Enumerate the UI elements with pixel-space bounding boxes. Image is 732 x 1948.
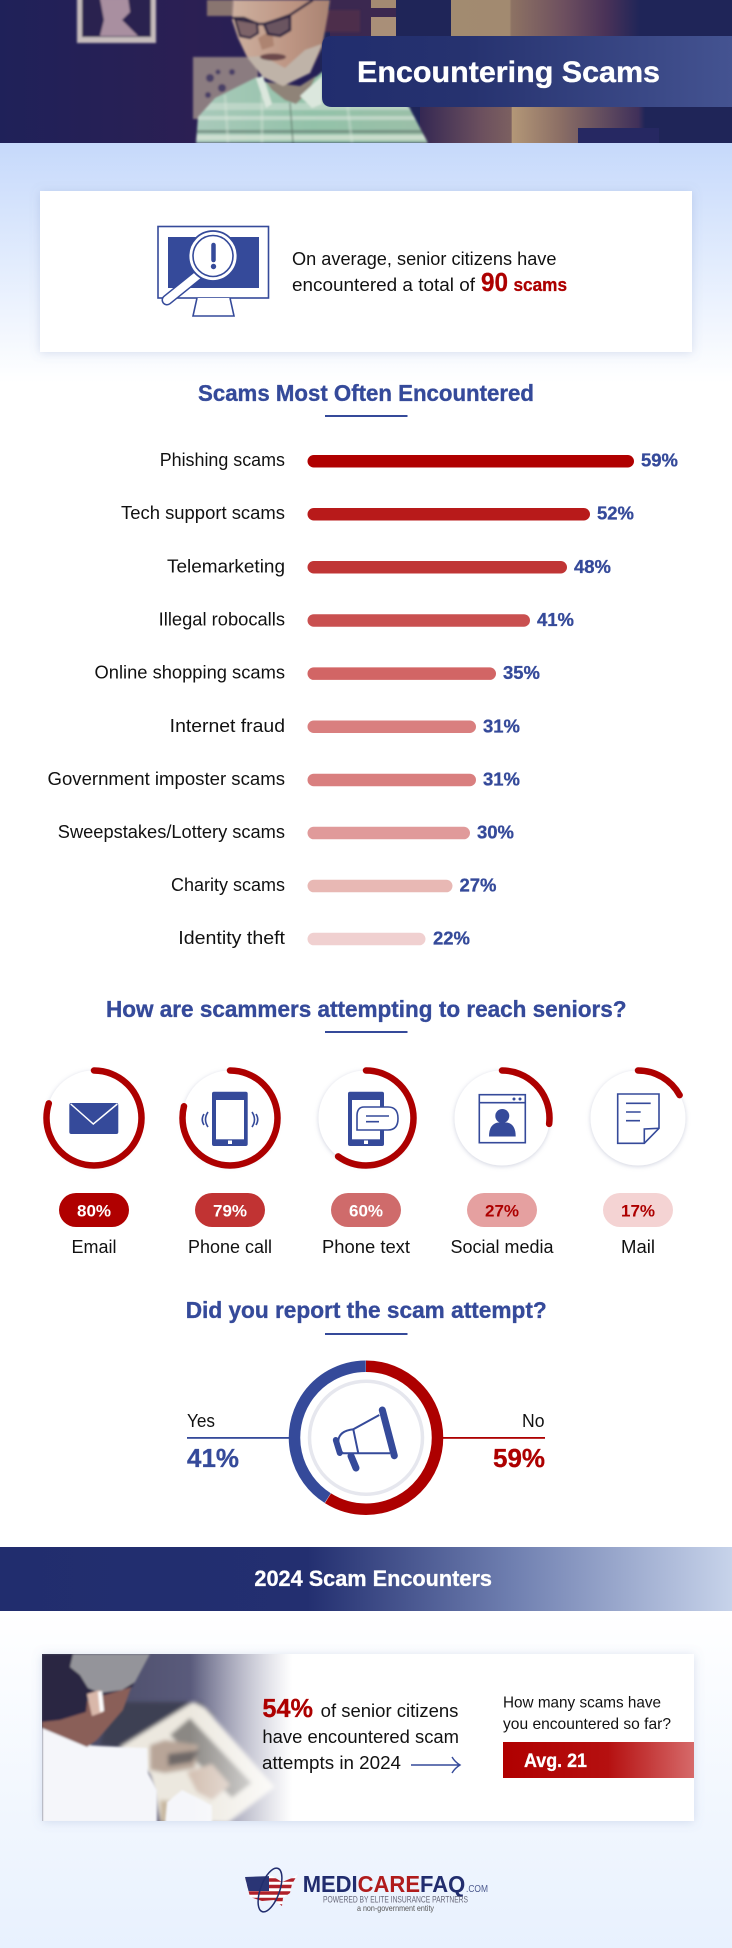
bar: Identity theft 22%: Identity theft — [178, 928, 285, 948]
icon: phone with chat bubble — [348, 1092, 398, 1146]
logo: MedicareFAQ: POWERED BY ELITE INSURANCE PARTNERS — [323, 1894, 468, 1904]
bar: Telemarketing 48%: 48% — [574, 556, 611, 577]
photo: senior typing on laptop — [42, 1654, 292, 1823]
channel: Social media 27% — [450, 1070, 554, 1257]
bar: Government imposter scams 31% — [48, 768, 520, 790]
section banner: 2024 Scam Encounters: 2024 Scam Encounters — [254, 1566, 492, 1591]
channel: Phone call 79%: Phone call — [188, 1237, 272, 1257]
bar: Sweepstakes/Lottery scams 30%: 30% — [477, 822, 514, 842]
bar: Government imposter scams 31%: 31% — [483, 768, 520, 790]
bar: Identity theft 22%: 22% — [433, 928, 470, 948]
label: Yes 41%: 41% — [187, 1443, 239, 1473]
label: No 59%: No — [522, 1411, 544, 1431]
section banner: 2024 Scam Encounters — [0, 1547, 732, 1611]
callout: Avg. 21 — [503, 1742, 694, 1778]
channel: Phone call 79%: 79% — [213, 1202, 247, 1220]
bar: Government imposter scams 31%: Government imposter scams — [48, 769, 285, 789]
logo: MedicareFAQ — [245, 1865, 488, 1915]
text: average encountered: scams — [514, 274, 567, 295]
logo: MedicareFAQ: .COM — [466, 1883, 488, 1895]
arrow — [411, 1757, 460, 1773]
channel: Email 80%: 80% — [77, 1202, 111, 1220]
bar: Tech support scams 52%: 52% — [597, 502, 634, 524]
icon: megaphone — [336, 1410, 394, 1468]
panel: average scams — [40, 191, 692, 352]
bar: Illegal robocalls 41% — [159, 609, 574, 630]
title banner: Encountering Scams — [322, 36, 732, 107]
text: average encountered: encountered a total of — [292, 275, 476, 295]
channel: Email 80%: Email — [72, 1237, 116, 1257]
text: how many scams: you encountered so far? — [503, 1716, 671, 1733]
bar: Phishing scams 59%: Phishing scams — [160, 450, 285, 470]
bar chart: scams most often encountered — [48, 450, 678, 948]
channel: Mail 17%: 17% — [621, 1202, 655, 1220]
bar: Phishing scams 59%: 59% — [641, 450, 678, 470]
bar: Internet fraud 31% — [170, 715, 520, 736]
label: No 59%: 59% — [493, 1443, 545, 1473]
text: 54% of senior citizens: attempts in 2024 — [262, 1753, 401, 1773]
title banner: Encountering Scams: Encountering Scams — [357, 56, 660, 89]
icon: document — [618, 1094, 659, 1143]
panel: 2024 encounters — [42, 1654, 694, 1823]
text: 54% of senior citizens: of senior citizens — [321, 1701, 458, 1721]
channel: Mail 17% — [590, 1070, 686, 1257]
icon: profile window — [479, 1095, 525, 1143]
channel: Email 80% — [46, 1070, 142, 1257]
icon: flag map — [245, 1867, 298, 1913]
icon: monitor with magnifier alert — [158, 226, 268, 316]
text: 54% of senior citizens: 54% — [262, 1693, 313, 1723]
text: how many scams: How many scams have — [503, 1694, 661, 1712]
channel: Phone call 79% — [182, 1070, 278, 1257]
channel: Social media 27%: Social media — [450, 1237, 554, 1257]
logo: MedicareFAQ: MEDICAREFAQ — [303, 1871, 465, 1897]
text: how many scams — [503, 1694, 671, 1733]
bar: Charity scams 27%: Charity scams — [171, 875, 285, 895]
channel: Mail 17%: Mail — [621, 1237, 655, 1257]
label: Yes 41%: Yes — [187, 1411, 215, 1431]
bar: Online shopping scams 35%: Online shopping scams — [94, 663, 285, 683]
bar: Phishing scams 59% — [160, 450, 678, 470]
callout: Avg. 21: Avg. 21 — [524, 1750, 587, 1772]
bar: Illegal robocalls 41%: 41% — [537, 609, 574, 630]
label: No 59% — [441, 1411, 545, 1473]
channel: Phone text 60% — [318, 1070, 414, 1257]
bar: Charity scams 27%: 27% — [460, 874, 496, 896]
channel: Phone text 60%: Phone text — [322, 1237, 410, 1257]
bar: Telemarketing 48%: Telemarketing — [167, 556, 285, 576]
bar: Charity scams 27% — [171, 874, 496, 896]
text: 54% of senior citizens: have encountered scam — [262, 1727, 459, 1747]
bar: Internet fraud 31%: Internet fraud — [170, 716, 285, 736]
bar: Online shopping scams 35%: 35% — [503, 662, 540, 683]
label: Yes 41% — [187, 1411, 291, 1473]
header photo: man at home — [0, 0, 732, 143]
bar: Sweepstakes/Lottery scams 30%: Sweepstakes/Lottery scams — [58, 822, 285, 842]
heading: Did you report the scam attempt?: Did you report the scam attempt? — [186, 1297, 547, 1323]
text: 54% of senior citizens — [262, 1693, 459, 1773]
icon: envelope — [69, 1103, 118, 1134]
bar: Internet fraud 31%: 31% — [483, 715, 520, 736]
bar: Sweepstakes/Lottery scams 30% — [58, 822, 514, 842]
channel: Phone text 60%: 60% — [349, 1202, 383, 1220]
text: average encountered — [292, 249, 567, 297]
bar: Identity theft 22% — [178, 928, 470, 948]
heading: Scams Most Often Encountered: Scams Most Often Encountered — [198, 380, 534, 406]
text: average encountered: On average, senior citizens have — [292, 249, 556, 269]
text: average encountered: 90 — [481, 267, 508, 297]
donut chart: reported scam attempt — [187, 1339, 545, 1536]
channel: Social media 27%: 27% — [485, 1202, 519, 1220]
heading: How are scammers attempting to reach seniors?: How are scammers attempting to reach seniors? — [106, 996, 626, 1022]
bar: Online shopping scams 35% — [94, 662, 540, 683]
bar: Tech support scams 52% — [121, 502, 634, 524]
logo: MedicareFAQ: a non-government entity — [357, 1903, 435, 1913]
bar: Illegal robocalls 41%: Illegal robocalls — [159, 609, 285, 629]
icon: ringing phone — [202, 1092, 258, 1146]
bar: Telemarketing 48% — [167, 556, 611, 577]
bar: Tech support scams 52%: Tech support scams — [121, 503, 285, 523]
